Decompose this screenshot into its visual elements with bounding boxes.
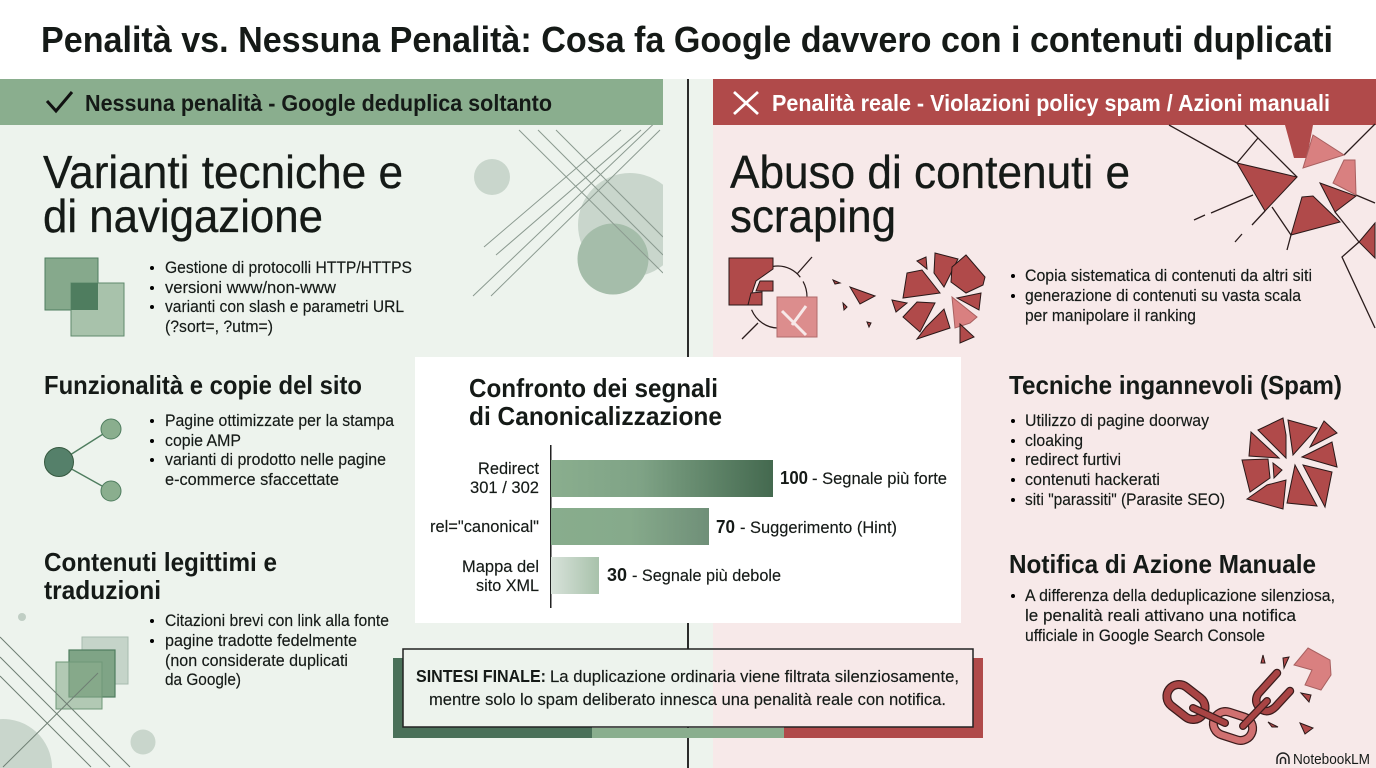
heading: manual action notice: Notifica di Azione Manuale [1009,549,1316,579]
icon: shattered polygon [892,253,985,343]
bullet list: technical variants: (?sort=, ?utm=) [165,317,273,336]
heading: technical variants: Varianti tecniche e [43,146,403,198]
bullet list: site features: e-commerce sfaccettate [165,470,339,489]
decorative lines bottom left [0,637,130,767]
bullet list: deceptive techniques: contenuti hackerati [1025,470,1160,489]
bar: canonical: - Suggerimento (Hint) [740,518,897,537]
bullet list: site features: Pagine ottimizzate per la stampa [165,411,395,430]
heading: site features: Funzionalità e copie del sito [44,370,362,400]
panel: canonicalization chart [415,357,961,623]
heading: deceptive techniques: Tecniche ingannevoli (Spam) [1009,370,1342,400]
icon: overlapping squares [45,258,124,336]
bullet list: technical variants: Gestione di protocolli HTTP/HTTPS [165,258,412,277]
bullet list: legitimate content [150,611,389,689]
bar chart [430,445,947,608]
decorative circles and lines top [472,125,663,296]
bar: sitemap: Mappa del [462,557,539,576]
heading: legitimate content: Contenuti legittimi e [44,547,277,577]
heading: content abuse [730,146,1130,242]
icon: share nodes [44,419,121,501]
bar: redirect: - Segnale più forte [812,469,947,488]
text block: manual action notice [1011,586,1335,645]
chart heading [469,373,722,431]
bar: sitemap: sito XML [476,576,539,595]
heading: technical variants: di navigazione [43,190,323,242]
icon: broken chain [1162,648,1331,744]
decorative shattered shapes top right [1169,124,1375,328]
bar: sitemap [462,557,781,595]
bar: canonical: 70 [716,517,735,537]
page background right [713,79,1376,768]
bullet list: site features [150,411,395,489]
heading: technical variants [43,146,403,242]
bar: canonical: rel="canonical" [430,517,539,536]
bar: sitemap: 30 [607,565,627,585]
heading: legitimate content: traduzioni [44,575,161,605]
bullet list: deceptive techniques: redirect furtivi [1025,450,1121,469]
chart heading: Confronto dei segnali [469,373,718,403]
header bar: real penalty: Penalità reale - Violazioni policy spam / Azioni manuali [772,90,1330,116]
bullet list: legitimate content: da Google) [165,670,241,689]
page background left [0,79,713,768]
bullet list: legitimate content: pagine tradotte fedelmente [165,631,357,650]
bullet list: legitimate content: Citazioni brevi con link alla fonte [165,611,389,630]
icon: shattered circle [1242,418,1337,509]
bullet list: technical variants: varianti con slash e parametri URL [165,297,404,316]
bar: canonical [430,508,897,545]
icon: check [47,92,72,111]
bullet list: legitimate content: (non considerate duplicati [165,651,348,670]
chart heading: di Canonicalizzazione [469,401,722,431]
logo: NotebookLM: NotebookLM [1293,751,1370,768]
bullet list: content abuse: generazione di contenuti su vasta scala [1025,286,1301,305]
text block: manual action notice: ufficiale in Google Search Console [1025,626,1265,645]
panel: real penalty [713,79,1376,768]
icon: broken squares [729,257,817,339]
icon: stacked squares [56,637,128,709]
callout: final summary: La duplicazione ordinaria viene filtrata silenziosamente, [550,667,959,686]
axis [550,445,552,608]
bullet list: content abuse: per manipolare il ranking [1025,306,1196,325]
bullet list: content abuse [1011,266,1312,325]
center divider line [687,79,689,768]
bar: redirect: 301 / 302 [470,478,539,497]
bullet list: deceptive techniques: siti "parassiti" (Parasite SEO) [1025,490,1225,509]
decorative circles bottom left [0,613,156,768]
heading: content abuse: Abuso di contenuti e [730,146,1130,198]
bar: sitemap: - Segnale più debole [632,566,781,585]
header bar: real penalty [713,79,1376,125]
heading: legitimate content [44,547,277,605]
bullet list: technical variants: versioni www/non-www [165,278,337,297]
header bar: no penalty: Nessuna penalità - Google deduplica soltanto [85,90,552,116]
header bar: no penalty [0,79,663,125]
bar: redirect [470,459,947,497]
callout: final summary: mentre solo lo spam deliberato innesca una penalità reale con notifica. [429,690,946,709]
bar: redirect: 100 [780,468,808,488]
bar: redirect: Redirect [478,459,539,478]
bullet list: content abuse: Copia sistematica di contenuti da altri siti [1025,266,1312,285]
bullet list: deceptive techniques [1011,411,1225,509]
bullet list: technical variants [150,258,412,336]
bullet list: deceptive techniques: Utilizzo di pagine doorway [1025,411,1209,430]
panel: no penalty [0,79,682,768]
bullet list: site features: copie AMP [165,431,241,450]
callout: final summary [393,649,983,738]
text block: manual action notice: A differenza della deduplicazione silenziosa, [1025,586,1335,605]
bullet list: deceptive techniques: cloaking [1025,431,1083,450]
heading: content abuse: scraping [730,190,896,242]
icon: scattered shards [833,280,875,327]
text block: manual action notice: le penalità reali attivano una notifica [1025,606,1297,625]
bullet list: site features: varianti di prodotto nelle pagine [165,450,386,469]
callout: final summary: SINTESI FINALE: [416,666,546,686]
icon: cross [734,92,758,114]
